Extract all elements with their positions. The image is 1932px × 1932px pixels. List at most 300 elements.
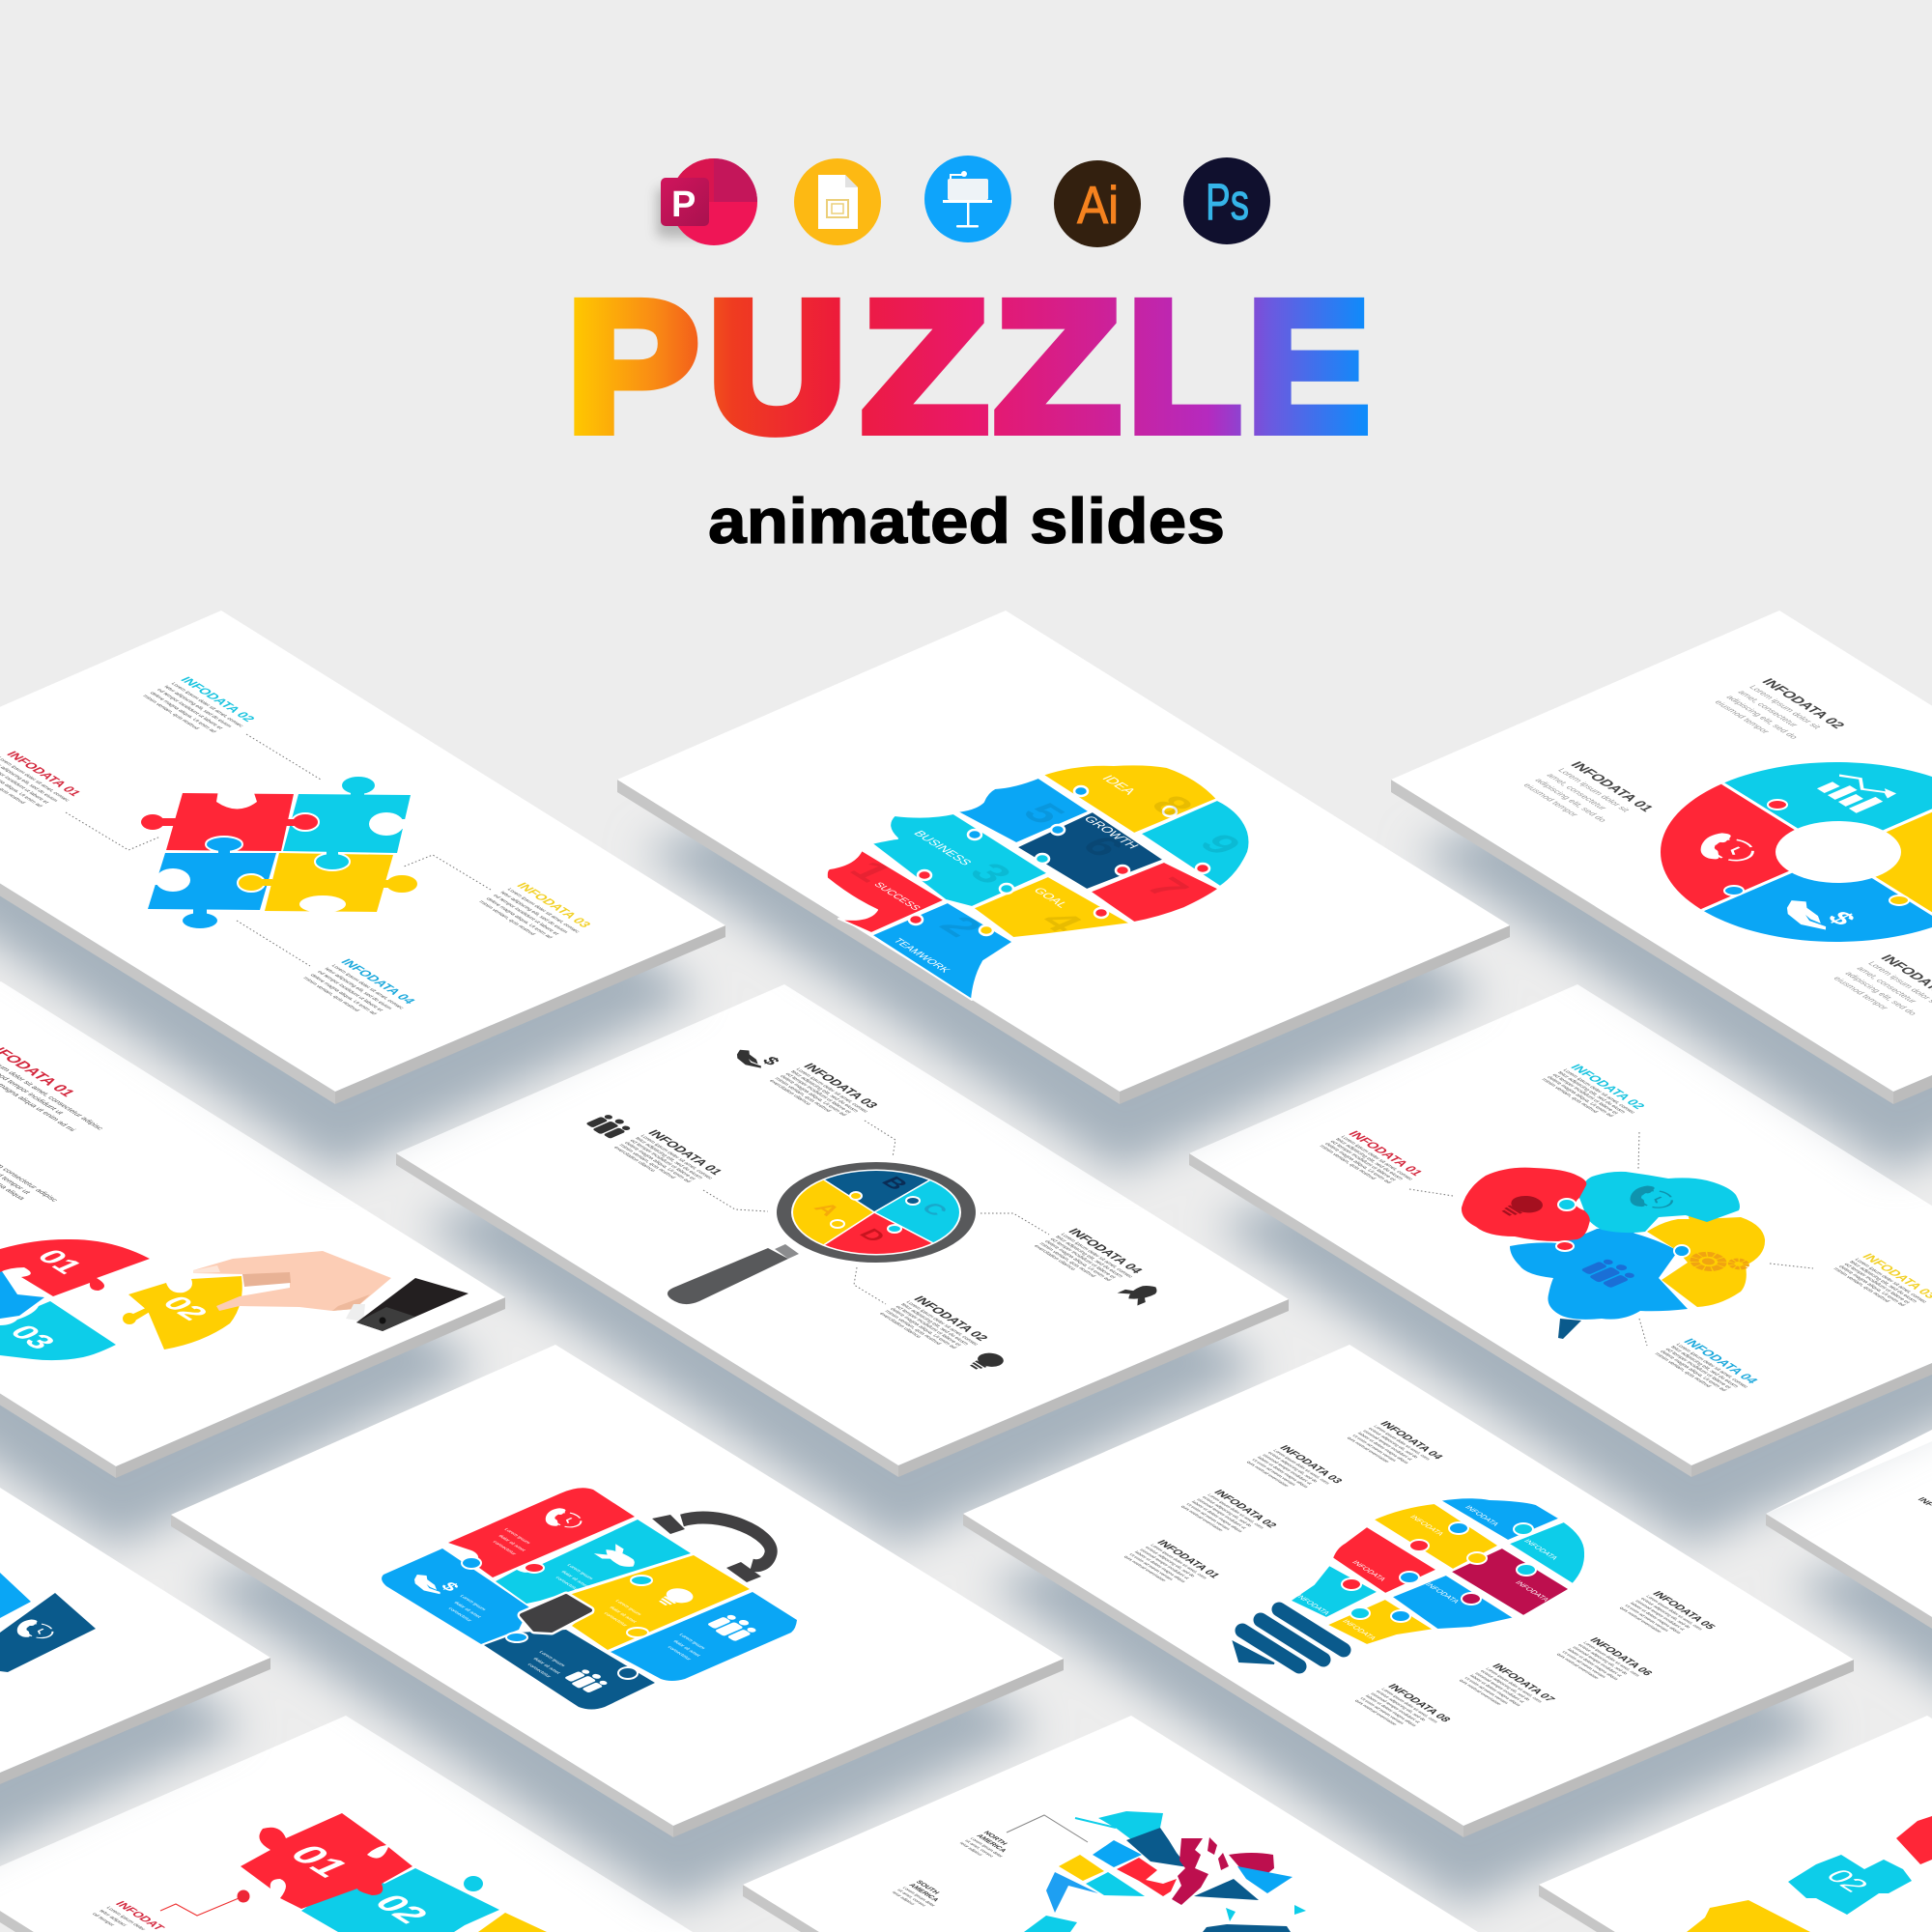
- panel: slide hand with puzzle: [0, 981, 505, 1478]
- piece text: consectetur: [602, 1611, 629, 1628]
- panel: slide light bulb: ectetur adipiscing elit, sed do: [1375, 1690, 1428, 1721]
- info blocks: [768, 1062, 884, 1125]
- panel: slide magnifier: Lorem ipsum dolor sit amet, consec: [639, 1134, 714, 1180]
- panel: slide magnifier: Lorem ipsum dolor sit amet, consec: [1059, 1233, 1134, 1279]
- piece text: Lorem ipsum: [613, 1599, 642, 1616]
- info blocks: exercitation ullamco: [768, 1079, 812, 1106]
- labels: BUSINESS: [911, 829, 975, 867]
- piece 02: [1788, 1855, 1912, 1915]
- info block 01: od tempor: [90, 1913, 116, 1927]
- icon: Illustrator: Ai: [1077, 175, 1119, 235]
- brain icons: [1494, 1183, 1749, 1289]
- panel: slide four piece puzzle: od tempor incididunt ut labore et: [492, 894, 560, 936]
- panel: slide magnifier: Lorem ipsum dolor sit amet, consec: [904, 1300, 980, 1347]
- panel: slide light bulb: INFODATA 03: [1277, 1444, 1345, 1485]
- info blocks: dolore magna aliqua. Ut enim ad: [1323, 1142, 1392, 1184]
- shadow falling on second row slides: [396, 1076, 1888, 1179]
- four piece puzzle: [141, 777, 417, 928]
- panel: slide brain: od tempor incididunt ut labore et: [1663, 1348, 1732, 1390]
- piece blue right: [611, 1592, 797, 1681]
- faint numerals: 2: [928, 911, 992, 942]
- panel: slide brain: Lorem ipsum dolor sit amet, consec: [1674, 1343, 1749, 1389]
- panel: slide light bulb: eiusmod tempor incididunt ut: [1474, 1672, 1526, 1704]
- panel: slide four piece puzzle: tetur adipiscing elit, sed do eiusm: [323, 967, 393, 1010]
- piece blue: [148, 853, 276, 910]
- info blocks: INFODATA 01: [1154, 1539, 1222, 1579]
- panel: slide light bulb: eiusmod tempor incididunt ut: [1370, 1692, 1422, 1724]
- panel: slide light bulb: [963, 1345, 1854, 1837]
- panel: slide magnifier: od tempor incididunt ut labore et: [894, 1305, 962, 1348]
- number 01: 01: [30, 1245, 91, 1277]
- piece navy: [0, 1593, 96, 1672]
- piece text: dolor sit amet: [608, 1605, 639, 1624]
- panel: slide light bulb: Ut enim ad minim veniam: [1561, 1650, 1607, 1678]
- header icons row: [657, 156, 1270, 247]
- subtitle: animated slides: [708, 485, 1225, 556]
- piece red: [1896, 1816, 1932, 1864]
- info block 01: Lorem ipsum dolor: [104, 1906, 147, 1931]
- panel: slide magnifier: minim veniam, quis nostrud: [617, 1144, 676, 1179]
- panel: slide far right: [1766, 1430, 1932, 1629]
- info blocks: od tempor incididunt ut labore et: [156, 688, 224, 730]
- info blocks: minim veniam, quis nostrud: [141, 695, 200, 730]
- cyan lobe: [1579, 1172, 1740, 1233]
- panel: slide bottom-left puzzle chain: [0, 1716, 693, 1932]
- piece yellow: [566, 1555, 750, 1650]
- panel: slide brain: dolore magna aliqua. Ut enim ad: [1837, 1264, 1906, 1307]
- panel: slide brain: minim veniam, quis nostrud: [1540, 1078, 1599, 1114]
- knobs: [1449, 1522, 1468, 1534]
- red lobe: [1462, 1168, 1590, 1241]
- info blocks: Lorem ipsum dolor sit: [1747, 684, 1824, 730]
- panel: slide light bulb: Ut enim ad minim veniam: [1351, 1434, 1398, 1462]
- sleeve: [356, 1278, 469, 1331]
- panel: slide brain: INFODATA 02: [1568, 1063, 1648, 1111]
- panel: slide light bulb: Lorem ipsum dolor sit amet, cons: [1380, 1688, 1439, 1723]
- piece text: Lorem ipsum: [502, 1527, 531, 1545]
- panel: slide bottom-right puzzle pieces: [1539, 1716, 1932, 1932]
- piece 02 knob: [123, 1307, 150, 1324]
- info blocks: INFODATA 02: [1758, 677, 1848, 730]
- panel: slide magnifier: dolore magna aliqua. Ut enim ad: [889, 1307, 957, 1350]
- knobs behind: [342, 777, 375, 794]
- piece blue: [0, 1268, 44, 1319]
- panel: slide light bulb: Ut enim ad minim veniam: [1463, 1676, 1510, 1704]
- number 02: 02: [155, 1292, 216, 1324]
- label north america: sit amet, consec: [964, 1839, 996, 1858]
- panel: slide four piece puzzle: dolore magna aliqua. Ut enim ad: [308, 974, 378, 1015]
- panel: slide magnifier: tetur adipiscing elit, sed do eiusm: [634, 1137, 704, 1180]
- piece text: dolor sit amet: [497, 1534, 527, 1552]
- bulb labels: INFODATA: [1294, 1593, 1332, 1616]
- labels: GROWTH: [1081, 814, 1142, 850]
- info blocks: quis nostrud exercitation: [1122, 1555, 1168, 1582]
- label south america: sit amet, consec: [896, 1889, 928, 1907]
- bulb labels: INFODATA: [1350, 1559, 1388, 1582]
- info block 01: INFODAT: [112, 1899, 168, 1932]
- info blocks: INFODATA 02: [178, 675, 258, 724]
- number 02: 02: [1818, 1866, 1875, 1896]
- piece text: Lorem ipsum: [537, 1650, 566, 1667]
- panel: slide light bulb: quis nostrud exercitation: [1245, 1461, 1291, 1488]
- panel: slide light bulb: labore et dolore magna aliqua: [1190, 1500, 1244, 1533]
- panel: slide light bulb: labore et dolore magna aliqua: [1629, 1602, 1683, 1634]
- panel: slide light bulb: Ut enim ad minim veniam: [1185, 1502, 1232, 1530]
- piece yellow: [265, 853, 393, 912]
- info blocks: Lorem ipsum dolor sit amet, consec: [169, 682, 244, 728]
- magnifier: [668, 1159, 976, 1304]
- info blocks: ectetur adipiscing elit, sed do: [1144, 1546, 1197, 1577]
- panel: slide four piece puzzle: INFODATA 01: [4, 750, 84, 798]
- label north america: [958, 1831, 1019, 1862]
- piece blue left: [382, 1548, 529, 1644]
- info blocks: amet, consectetur: [1736, 689, 1801, 728]
- label north america: tetur adipisci: [958, 1841, 983, 1857]
- lens pieces: [793, 1171, 959, 1254]
- info blocks: eiusmod tempor incididunt ut: [1139, 1548, 1191, 1580]
- icon: Illustrator: [1054, 160, 1141, 247]
- panel: slide light bulb: Lorem ipsum dolor sit amet, cons: [1272, 1449, 1331, 1485]
- info block 01: tetur adipisci: [98, 1909, 128, 1927]
- panel: slide four piece puzzle: dolore magna aliqua. Ut enim ad: [484, 897, 554, 939]
- title: PUZZLE: P: [566, 263, 699, 469]
- notches: [216, 790, 257, 810]
- panel: slide light bulb: Lorem ipsum dolor sit amet, cons: [1207, 1493, 1265, 1529]
- panel: slide four piece puzzle: [0, 611, 725, 1104]
- puzzle piece 02: [301, 1868, 499, 1932]
- panel: slide brain: [1189, 984, 1932, 1477]
- piece text: Lorem ipsum: [458, 1594, 487, 1611]
- lens letters: D: [853, 1226, 892, 1245]
- panel: slide light bulb: quis nostrud exercitation: [1353, 1699, 1399, 1726]
- info blocks: eiusmod tempor: [1713, 699, 1772, 734]
- info blocks: tetur adipiscing elit, sed do eiusm: [1334, 1138, 1405, 1181]
- piece text: consectetur: [666, 1645, 693, 1662]
- bulb labels: INFODATA: [1463, 1504, 1501, 1527]
- piece text: [446, 1527, 706, 1679]
- info blocks: Ut enim ad minim veniam: [1128, 1552, 1175, 1580]
- panel: slide magnifier: dolore magna aliqua. Ut enim ad: [1043, 1239, 1112, 1282]
- panel: slide light bulb: labore et dolore magna aliqua: [1566, 1648, 1620, 1681]
- title: PUZZLE: Z: [994, 263, 1121, 469]
- label south america: AMERICA: [907, 1883, 940, 1902]
- panel: slide brain: tetur adipiscing elit, sed do eiusm: [1848, 1261, 1918, 1304]
- label north america: AMERICA: [975, 1833, 1008, 1853]
- drop shadows under the slides: [0, 717, 1932, 1907]
- info blocks: INFODATA 01: [1346, 1129, 1426, 1178]
- labels: [871, 773, 1142, 975]
- shadow falling on lower slides: [584, 1441, 1932, 1910]
- panel: slide light bulb: labore et dolore magna aliqua: [1364, 1694, 1418, 1727]
- faint numerals: 3: [958, 858, 1022, 889]
- panel: slide donut: eiusmod tempor: [1832, 976, 1890, 1010]
- connector: [160, 1889, 249, 1916]
- panel: slide donut: adipiscing elit, sed do: [1843, 970, 1919, 1016]
- puzzle piece yellow: [478, 1913, 547, 1932]
- icon phone: [9, 1617, 58, 1643]
- piece yellow: [1687, 1900, 1810, 1932]
- bulb labels: INFODATA: [1522, 1538, 1560, 1561]
- panel: slide four piece puzzle: INFODATA 04: [338, 957, 419, 1006]
- piece text: Lorem ipsum: [677, 1633, 706, 1650]
- icons: [407, 1506, 761, 1693]
- title: PUZZLE: Z: [862, 263, 988, 469]
- bulb base: [1234, 1609, 1344, 1666]
- panel: slide magnifier: minim veniam, quis nostrud: [1037, 1242, 1096, 1278]
- info blocks: [141, 675, 261, 741]
- piece text: Lorem ipsum: [565, 1563, 594, 1580]
- panel: slide magnifier: exercitation ullamco: [612, 1146, 657, 1173]
- center clasp: [522, 1596, 590, 1631]
- number 01: 01: [280, 1840, 359, 1882]
- world puzzle map: [1024, 1811, 1306, 1932]
- faint numerals: [838, 790, 1252, 942]
- panel: slide light bulb: eiusmod tempor incididunt ut: [1634, 1600, 1687, 1632]
- info blocks: tetur adipiscing elit, sed do eiusm: [789, 1070, 860, 1114]
- icon: PowerPoint: P: [671, 185, 696, 225]
- panel: slide donut: amet, consectetur: [1545, 772, 1609, 811]
- dotted connectors: [66, 734, 491, 966]
- panel: slide light bulb: quis nostrud exercitation: [1179, 1505, 1225, 1532]
- panel: slide light bulb: ectetur adipiscing elit, sed do: [1266, 1451, 1320, 1483]
- panel: slide light bulb: INFODATA 05: [1650, 1590, 1718, 1631]
- piece 01: [0, 1239, 150, 1296]
- panel: slide light bulb: eiusmod tempor incididunt ut: [1362, 1430, 1414, 1462]
- panel: slide donut: [1391, 611, 1932, 1104]
- panel: slide magnifier: minim veniam, quis nostrud: [883, 1310, 942, 1346]
- piece red: [166, 793, 294, 851]
- faint numerals: 8: [1140, 790, 1204, 821]
- faint numerals: 5: [1011, 798, 1075, 829]
- piece red: [448, 1488, 635, 1577]
- panel: slide donut: eiusmod tempor: [1521, 782, 1580, 817]
- info blocks: tetur adipiscing elit, sed do eiusm: [162, 685, 233, 728]
- label south america: Lorem ipsum dolor: [901, 1886, 937, 1907]
- panel: slide brain: Lorem ipsum dolor sit amet, consec: [1561, 1068, 1636, 1115]
- piece navy: [484, 1630, 655, 1710]
- info blocks: od tempor incididunt ut labore et: [1328, 1140, 1397, 1182]
- panel: slide four piece puzzle: minim veniam, quis nostrud: [301, 977, 360, 1012]
- info blocks: minim veniam, quis nostrud: [1318, 1145, 1377, 1180]
- piece text: dolor sit amet: [671, 1639, 702, 1658]
- piece text: dolor sit amet: [452, 1601, 483, 1619]
- label south america: [891, 1880, 952, 1912]
- info blocks: Lorem ipsum dolor sit amet, consec: [1339, 1135, 1414, 1181]
- panel: slide head: [617, 611, 1510, 1104]
- panel: slide bag: [171, 1345, 1064, 1837]
- label south america: SOUTH: [914, 1880, 940, 1895]
- panel: slide four piece puzzle: Lorem ipsum dolor sit amet, consec: [329, 964, 405, 1010]
- knobs: [909, 786, 1209, 935]
- bulb labels: INFODATA: [1341, 1618, 1378, 1641]
- donut puzzle: [1661, 762, 1932, 942]
- lens letters: B: [875, 1174, 914, 1193]
- faint numerals: 7: [1135, 872, 1199, 903]
- info blocks: [1713, 677, 1848, 751]
- info blocks: Lorem ipsum dolor sit amet, consec: [794, 1067, 869, 1114]
- icon: Keynote: [924, 156, 1011, 242]
- icon: PowerPoint: [657, 158, 757, 245]
- info blocks: adipiscing elit, sed do: [1724, 694, 1801, 740]
- panel: slide left navy piece: [0, 1488, 270, 1784]
- bulb puzzle: [1290, 1497, 1585, 1645]
- panel: slide light bulb: Ut enim ad minim veniam: [1624, 1604, 1670, 1632]
- handle: [668, 1248, 788, 1304]
- handle: [652, 1515, 771, 1582]
- label north america: Lorem ipsum dolor: [969, 1836, 1005, 1858]
- info blocks: [1318, 1129, 1429, 1191]
- panel: slide light bulb: quis nostrud exercitation: [1458, 1679, 1503, 1706]
- panel: slide light bulb: INFODATA 07: [1490, 1662, 1557, 1703]
- panel: slide four piece puzzle: INFODATA 03: [514, 881, 594, 929]
- info blocks: labore et dolore magna aliqua: [1133, 1550, 1187, 1583]
- panel: slide magnifier: tetur adipiscing elit, sed do eiusm: [899, 1303, 970, 1347]
- info blocks: [1122, 1539, 1222, 1593]
- piece text: dolor sit amet: [559, 1570, 590, 1588]
- label north america: NORTH: [981, 1831, 1009, 1846]
- head puzzle: [827, 764, 1250, 1000]
- lens letters: [808, 1174, 953, 1245]
- connector: [1007, 1815, 1088, 1842]
- panel: slide brain: minim veniam, quis nostrud: [1832, 1267, 1890, 1303]
- faint numerals: 6: [1070, 831, 1134, 862]
- panel: slide bottom map: [743, 1716, 1478, 1932]
- panel: slide light bulb: ectetur adipiscing elit, sed do: [1639, 1597, 1692, 1629]
- bag puzzle: [382, 1488, 797, 1710]
- panel: slide light bulb: ectetur adipiscing elit, sed do: [1479, 1669, 1532, 1701]
- piece text: consectetur: [446, 1606, 473, 1623]
- panel: slide light bulb: quis nostrud exercitation: [1346, 1436, 1391, 1463]
- bulb labels: INFODATA: [1424, 1581, 1462, 1605]
- panel: slide light bulb: quis nostrud exercitation: [1618, 1606, 1663, 1634]
- panel: slide light bulb: INFODATA 04: [1378, 1420, 1446, 1461]
- piece 02: [128, 1276, 242, 1350]
- dotted connectors: [703, 1121, 1049, 1304]
- panel: slide brain: Lorem ipsum dolor sit amet, consec: [1853, 1258, 1928, 1304]
- title: PUZZLE: L: [1127, 263, 1241, 469]
- lens letters: C: [915, 1200, 953, 1219]
- panel: slide brain: INFODATA 04: [1681, 1337, 1762, 1385]
- panel: slide brain: dolore magna aliqua. Ut enim ad: [1659, 1350, 1727, 1392]
- panel: slide donut: amet, consectetur: [1855, 965, 1919, 1005]
- sleeve cuff: [346, 1304, 365, 1321]
- panel: slide light bulb: eiusmod tempor incididunt ut: [1196, 1498, 1248, 1530]
- info blocks: dolore magna aliqua. Ut enim ad: [779, 1074, 847, 1117]
- icon: Photoshop: Ps: [1206, 174, 1249, 231]
- panel: slide light bulb: Ut enim ad minim veniam: [1251, 1458, 1297, 1486]
- panel: slide light bulb: labore et dolore magna aliqua: [1468, 1674, 1522, 1707]
- panel: slide magnifier: INFODATA 04: [1065, 1227, 1147, 1275]
- piece text: consectetur: [491, 1540, 518, 1556]
- labels: SUCCESS: [871, 881, 923, 912]
- piece cyan: [283, 794, 411, 853]
- panel: slide brain: od tempor incididunt ut labore et: [1842, 1263, 1911, 1305]
- bulb labels: INFODATA: [1408, 1514, 1446, 1537]
- title: PUZZLE: U: [708, 263, 846, 469]
- bulb labels: [1294, 1504, 1560, 1641]
- piece text: consectetur: [526, 1662, 553, 1679]
- panel: slide four piece puzzle: tetur adipiscing elit, sed do eiusm: [498, 891, 569, 934]
- panel: slide four piece puzzle: Lorem ipsum dolor sit amet, consec: [505, 888, 581, 934]
- blue lobe: [1510, 1229, 1688, 1320]
- hand: [193, 1251, 469, 1331]
- panel: slide brain: minim veniam, quis nostrud: [1653, 1352, 1712, 1388]
- panel: slide magnifier: [396, 984, 1289, 1477]
- panel: slide magnifier: exercitation ullamco: [878, 1312, 923, 1339]
- faint numerals: 1: [838, 856, 902, 887]
- panel: slide light bulb: eiusmod tempor incididunt ut: [1572, 1646, 1624, 1678]
- info blocks: Lorem ipsum dolor sit amet, cons: [1150, 1544, 1208, 1579]
- panel: slide four piece puzzle: od tempor incididunt ut labore et: [316, 970, 384, 1012]
- panel: slide magnifier: od tempor incididunt ut labore et: [1048, 1237, 1117, 1280]
- panel: slide light bulb: ectetur adipiscing elit, sed do: [1367, 1427, 1420, 1459]
- info blocks: minim veniam, quis nostrud: [773, 1077, 832, 1113]
- panel: slide magnifier: exercitation ullamco: [1033, 1244, 1077, 1271]
- panel: slide light bulb: Lorem ipsum dolor sit amet, cons: [1582, 1641, 1641, 1677]
- panel: slide light bulb: INFODATA 08: [1385, 1683, 1453, 1723]
- panel: slide light bulb: Lorem ipsum dolor sit amet, cons: [1485, 1667, 1544, 1703]
- piece 03: [0, 1301, 116, 1360]
- labels: GOAL: [1031, 886, 1071, 909]
- icon: Google Slides: [794, 158, 881, 245]
- label south america: tetur adipisci: [891, 1890, 916, 1906]
- puzzle piece 01: [241, 1813, 412, 1909]
- panel: slide light bulb: labore et dolore magna aliqua: [1256, 1456, 1310, 1489]
- panel: slide light bulb: INFODATA 06: [1587, 1636, 1655, 1677]
- panel: slide light bulb: Lorem ipsum dolor sit amet, cons: [1373, 1425, 1432, 1461]
- panel: slide brain: dolore magna aliqua. Ut enim ad: [1546, 1075, 1614, 1118]
- labels: TEAMWORK: [891, 937, 953, 975]
- piece cyan: [496, 1520, 691, 1604]
- panel: slide light bulb: ectetur adipiscing elit, sed do: [1577, 1643, 1630, 1675]
- info blocks: od tempor incididunt ut labore et: [783, 1072, 852, 1115]
- inner knobs: [292, 813, 319, 831]
- brain puzzle: [1462, 1168, 1765, 1339]
- number 03: 03: [2, 1321, 64, 1353]
- labels: IDEA: [1099, 773, 1140, 797]
- faint numerals: 9: [1188, 829, 1252, 860]
- icon: Photoshop: [1183, 157, 1270, 244]
- donut icons: [1688, 767, 1898, 935]
- panel: slide light bulb: INFODATA 02: [1211, 1489, 1279, 1529]
- info blocks: INFODATA 03: [801, 1062, 881, 1110]
- panel: slide magnifier: INFODATA 01: [645, 1128, 725, 1177]
- panel: slide brain: tetur adipiscing elit, sed do eiusm: [1669, 1346, 1740, 1389]
- piece text: consectetur: [554, 1576, 581, 1592]
- panel: slide magnifier: tetur adipiscing elit, sed do eiusm: [1054, 1236, 1124, 1279]
- panel: slide donut: adipiscing elit, sed do: [1533, 777, 1609, 823]
- icons: [584, 1042, 1166, 1373]
- dotted connectors: [1409, 1132, 1813, 1346]
- panel: slide light bulb: eiusmod tempor incididunt ut: [1262, 1454, 1314, 1486]
- panel: slide magnifier: od tempor incididunt ut labore et: [628, 1139, 696, 1181]
- piece text: dolor sit amet: [531, 1657, 562, 1675]
- bulb labels: INFODATA: [1514, 1579, 1551, 1603]
- faint numerals: 4: [1029, 906, 1094, 938]
- number 02: 02: [365, 1890, 437, 1928]
- bulb pieces: [1439, 1497, 1560, 1541]
- panel: slide donut: Lorem ipsum dolor sit: [1556, 767, 1633, 813]
- yellow lobe: [1647, 1217, 1765, 1307]
- panel: slide brain: tetur adipiscing elit, sed do eiusm: [1556, 1071, 1627, 1115]
- panel: slide light bulb: Ut enim ad minim veniam: [1359, 1696, 1406, 1724]
- panel: slide light bulb: labore et dolore magna aliqua: [1356, 1432, 1410, 1464]
- info blocks: dolore magna aliqua. Ut enim ad: [148, 692, 217, 733]
- panel: slide light bulb: ectetur adipiscing elit, sed do: [1201, 1495, 1254, 1527]
- panel: slide magnifier: INFODATA 02: [911, 1294, 991, 1343]
- lens letters: A: [808, 1200, 846, 1219]
- panel: slide brain: od tempor incididunt ut labore et: [1550, 1073, 1619, 1116]
